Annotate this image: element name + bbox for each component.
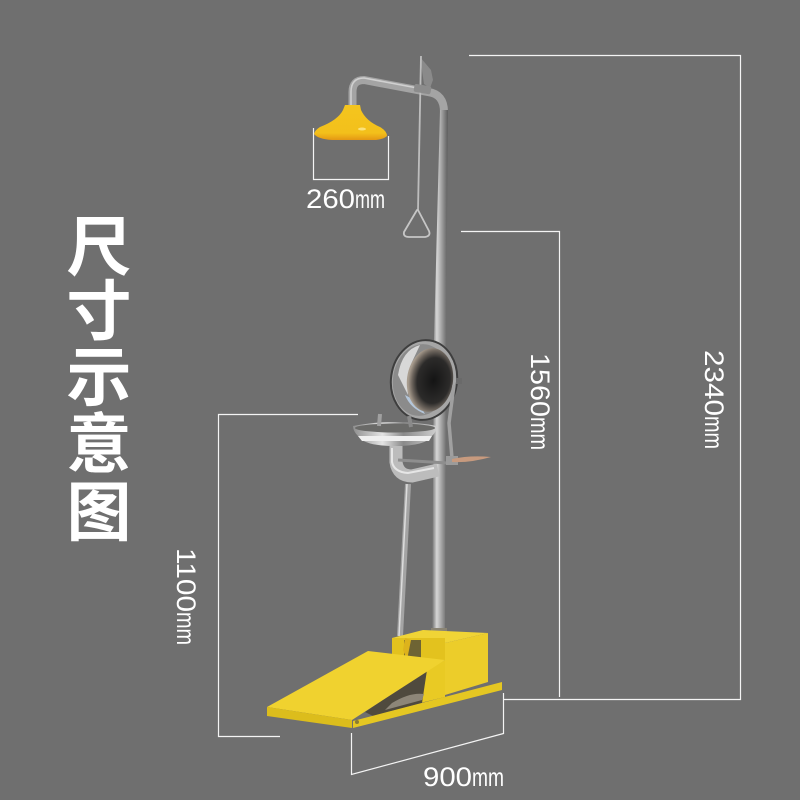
dimension: total height 2340mm xyxy=(469,56,740,700)
foot rod xyxy=(399,484,408,636)
dimension: base width 900mm: 900 xyxy=(423,762,472,792)
title: 寸 xyxy=(66,259,132,353)
dimension: basin height 1100mm xyxy=(171,414,358,736)
dimension: total height 2340mm: 2340 xyxy=(699,350,729,416)
dimension: base width 900mm xyxy=(352,693,504,792)
main pipe xyxy=(351,78,448,636)
title: 尺 xyxy=(66,195,132,289)
dimension: pull handle height 1560mm: 1560 xyxy=(525,353,555,417)
dimension: shower head width 260mm: mm xyxy=(355,184,385,214)
foot pedal base xyxy=(267,630,502,728)
title xyxy=(66,195,132,554)
eyewash dish xyxy=(386,336,462,458)
dimension: pull handle height 1560mm: mm xyxy=(525,417,555,450)
dimension: pull handle height 1560mm xyxy=(461,232,560,697)
dimension: shower head width 260mm: 260 xyxy=(306,184,355,214)
shower head xyxy=(314,105,387,140)
dimension: total height 2340mm: mm xyxy=(699,416,729,449)
pull rod and handle xyxy=(404,56,433,237)
drain pipe and valve xyxy=(392,446,491,476)
equipment: emergency shower and eyewash station xyxy=(267,56,502,728)
dimension: shower head width 260mm xyxy=(306,128,388,214)
dimension: basin height 1100mm: 1100 xyxy=(171,548,201,612)
title: 意 xyxy=(66,392,132,486)
title: 图 xyxy=(66,460,132,554)
dimension: basin height 1100mm: mm xyxy=(171,612,201,645)
wash basin xyxy=(353,414,437,446)
title: 示 xyxy=(66,325,132,419)
dimension: base width 900mm: mm xyxy=(472,762,504,792)
